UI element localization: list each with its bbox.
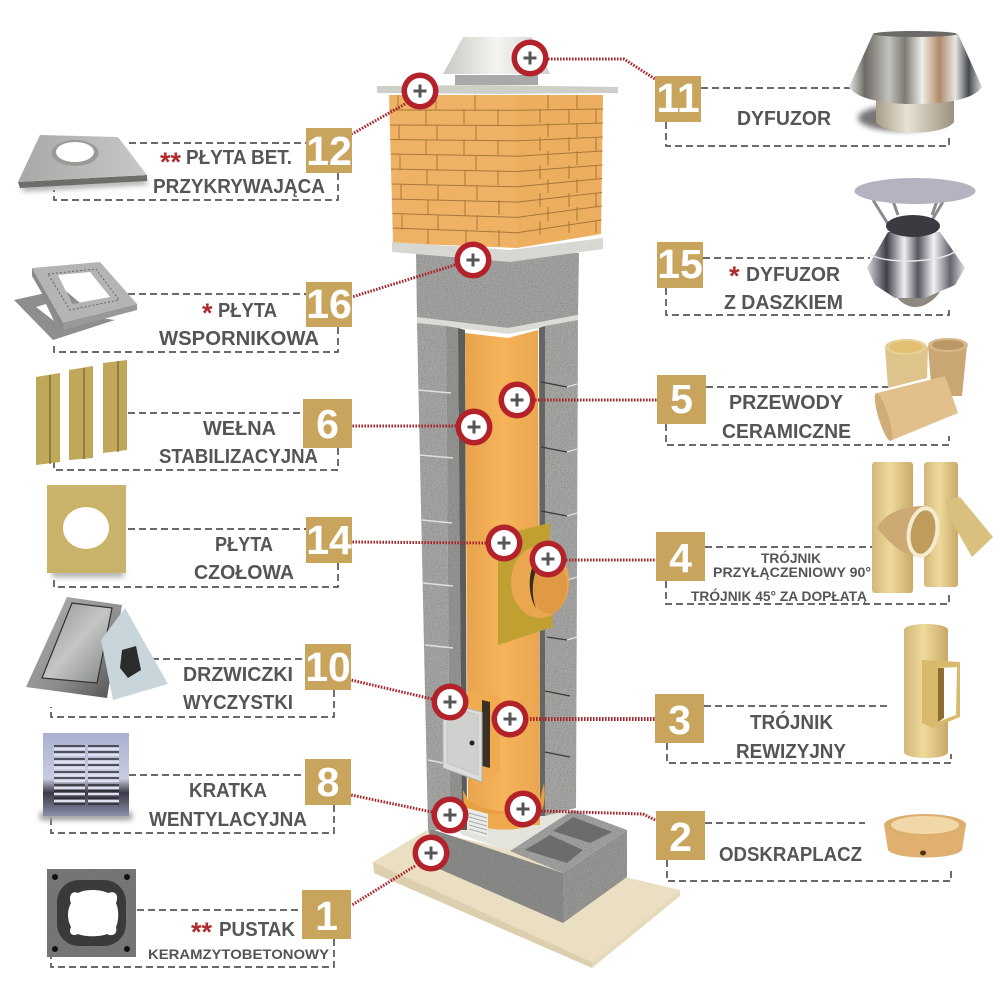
callout 16: support plate: PŁYTA <box>218 300 277 322</box>
brick section <box>389 95 603 248</box>
chimney illustration <box>373 37 680 968</box>
callout 3: revision tee <box>655 624 960 763</box>
callout 12: cover plate: ** <box>160 147 182 177</box>
callout 10: cleaning door: DRZWICZKI <box>183 664 293 686</box>
callout 14: front plate: CZOŁOWA <box>194 562 294 584</box>
callout 5: ceramic flues <box>657 338 968 445</box>
icon: concrete plate <box>18 135 147 191</box>
callout 3: revision tee: TRÓJNIK <box>750 710 834 734</box>
callout 11: diffuser: 11 <box>656 75 700 121</box>
callout 14: front plate: PŁYTA <box>215 534 273 556</box>
callout 16: support plate <box>14 262 352 352</box>
callout 6: stabilising wool: STABILIZACYJNA <box>159 446 318 468</box>
callout 4: connection tee: TRÓJNIK 45° ZA DOPŁATĄ <box>691 587 867 604</box>
callout 6: stabilising wool: 6 <box>316 401 339 447</box>
callout 8: ventilation grille <box>40 733 351 833</box>
callout 4: connection tee: 4 <box>669 535 692 581</box>
base block <box>428 810 627 923</box>
icon: ceramic tubes <box>871 338 968 442</box>
callout 1: hollow block: PUSTAK <box>219 919 296 941</box>
diffuser on chimney <box>443 37 550 85</box>
callout 16: support plate: * <box>202 298 213 328</box>
cleaning door <box>443 702 482 782</box>
icon: metal door <box>26 597 168 700</box>
callout 14: front plate <box>47 485 352 587</box>
callout 14: front plate: 14 <box>306 517 352 563</box>
callout 3: revision tee: 3 <box>668 697 691 743</box>
callout 8: ventilation grille: WENTYLACYJNA <box>149 809 307 831</box>
callout 2: condensate trap: 2 <box>669 814 692 860</box>
callout 15: diffuser with hood: * <box>729 261 740 291</box>
icon: support plate <box>14 262 137 340</box>
callout 3: revision tee: REWIZYJNY <box>736 741 847 763</box>
icon: ceramic revision tee <box>904 624 960 758</box>
marker pins <box>402 40 566 872</box>
icon: wool strips <box>36 360 127 465</box>
callout 15: diffuser with hood: 15 <box>657 241 703 287</box>
upper concrete shaft <box>416 253 579 328</box>
callout 16: support plate: 16 <box>306 281 352 327</box>
ceramic flue <box>465 330 540 825</box>
callout 4: connection tee: TRÓJNIK <box>761 549 821 566</box>
callout 12: cover plate: PŁYTA BET. <box>186 147 292 169</box>
icon: ceramic bowl <box>884 814 966 858</box>
ventilation grille <box>467 808 488 838</box>
icon: steel diffuser <box>849 31 982 132</box>
icon: block cross-section <box>47 869 136 957</box>
callout 6: stabilising wool <box>36 360 352 470</box>
callout 12: cover plate: PRZYKRYWAJĄCA <box>153 176 325 198</box>
right wall <box>539 320 578 816</box>
icon: wool front plate <box>47 485 126 577</box>
callout 16: support plate: WSPORNIKOWA <box>159 328 319 350</box>
callout 8: ventilation grille: KRATKA <box>189 780 267 802</box>
callout 10: cleaning door <box>26 597 351 717</box>
callout 10: cleaning door: 10 <box>305 644 351 690</box>
lower ledge <box>392 238 603 262</box>
callout 2: condensate trap <box>656 811 966 881</box>
revision tee <box>467 690 500 777</box>
callout 5: ceramic flues: 5 <box>670 376 693 422</box>
callout 15: diffuser with hood: Z DASZKIEM <box>724 292 843 314</box>
connector lines <box>351 59 657 905</box>
front plate and branch <box>498 523 569 645</box>
callout 5: ceramic flues: CERAMICZNE <box>722 421 851 443</box>
support plate under shaft <box>417 315 578 334</box>
callout 1: hollow block: KERAMZYTOBETONOWY <box>148 946 330 962</box>
callout 12: cover plate <box>18 128 352 200</box>
left wall <box>417 323 467 830</box>
callout 1: hollow block: ** <box>191 917 213 947</box>
callout 12: cover plate: 12 <box>306 128 352 174</box>
callout 8: ventilation grille: 8 <box>317 759 339 805</box>
callout 2: condensate trap: ODSKRAPLACZ <box>719 844 862 866</box>
icon: chrome grille <box>40 733 132 820</box>
callout 5: ceramic flues: PRZEWODY <box>729 392 844 414</box>
callout 11: diffuser: DYFUZOR <box>737 108 832 130</box>
callout 4: connection tee: PRZYŁĄCZENIOWY 90° <box>713 564 871 580</box>
callout 1: hollow block <box>47 869 351 967</box>
icon: ceramic tees <box>872 462 993 593</box>
callout 4: connection tee <box>656 462 993 604</box>
icon: hooded diffuser <box>854 178 976 307</box>
callout 6: stabilising wool: WEŁNA <box>203 418 276 440</box>
callout 10: cleaning door: WYCZYSTKI <box>183 692 293 714</box>
foundation slab <box>373 830 680 968</box>
callout 1: hollow block: 1 <box>315 893 338 939</box>
callout 11: diffuser <box>655 31 982 146</box>
condensate bowl <box>463 783 545 830</box>
callout 15: diffuser with hood: DYFUZOR <box>746 264 841 286</box>
cap plate <box>377 85 618 94</box>
callout 15: diffuser with hood <box>657 178 976 315</box>
